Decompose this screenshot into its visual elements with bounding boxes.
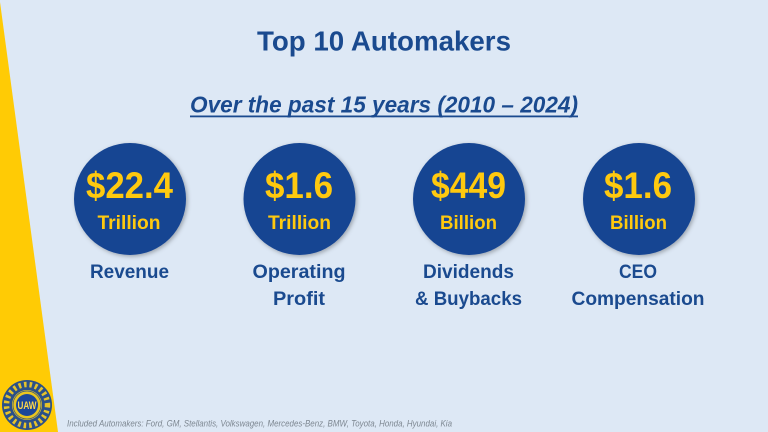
stat: operating profit: Trillion [268, 212, 331, 234]
stat: dividends and buybacks [413, 143, 525, 310]
icon: UAW seal: UAW [18, 400, 37, 412]
stat: operating profit [244, 143, 356, 310]
stat: revenue: $22.4 [86, 165, 173, 206]
stat: CEO compensation: $1.6 [604, 165, 672, 206]
title: Top 10 Automakers [257, 26, 511, 56]
stat: operating profit: $1.6 [265, 165, 333, 206]
stat: CEO compensation: CEO [619, 262, 657, 283]
icon: UAW seal [2, 380, 52, 430]
stat: CEO compensation [572, 143, 704, 310]
stat: operating profit: Profit [273, 289, 326, 310]
stat: revenue: Trillion [98, 212, 160, 234]
stat: revenue: Revenue [90, 262, 169, 283]
stat: dividends and buybacks: $449 [431, 165, 506, 206]
stat: CEO compensation: Billion [610, 212, 667, 234]
stat: operating profit: Operating [252, 262, 346, 283]
stat: dividends and buybacks: & Buybacks [415, 289, 522, 310]
yellow side wedge [0, 2, 58, 432]
stat: revenue [74, 143, 186, 283]
subtitle: Over the past 15 years (2010 – 2024) [190, 92, 578, 118]
stat: dividends and buybacks: Billion [440, 212, 497, 234]
stat: dividends and buybacks: Dividends [423, 262, 514, 283]
stat: CEO compensation: Compensation [572, 289, 704, 310]
footnote: Included Automakers: Ford, GM, Stellantis, Volkswagen, Mercedes-Benz, BMW, Toyota, Honda, Hyundai, Kia [67, 418, 452, 428]
